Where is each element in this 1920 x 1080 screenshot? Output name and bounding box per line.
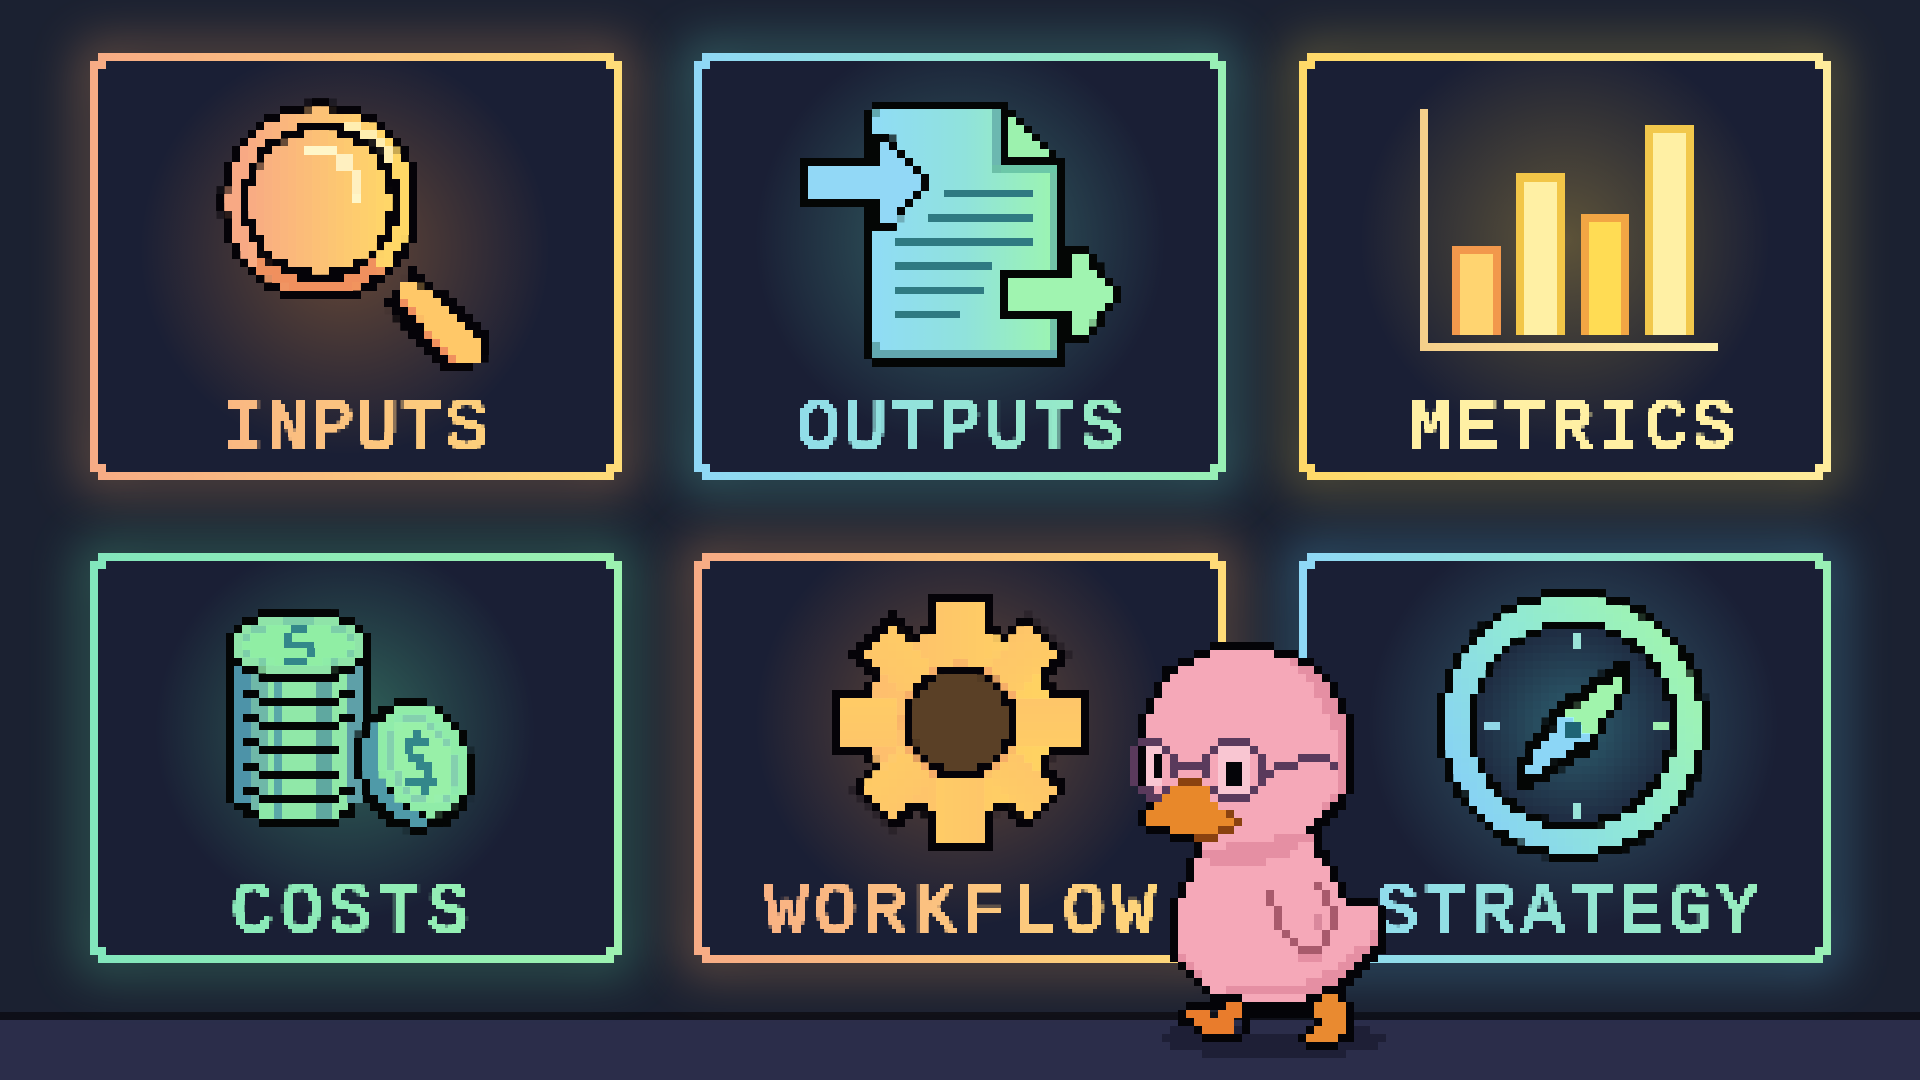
leaning coin: [335, 681, 494, 848]
duck wing crease: [1314, 914, 1322, 930]
duck shading: [1178, 658, 1378, 994]
floor: [0, 1012, 1920, 1080]
duck right foot: [1306, 994, 1346, 1042]
duck glasses frame: [1130, 738, 1338, 802]
bar 3: [1581, 214, 1629, 335]
document text lines: [895, 190, 1033, 318]
arrow in: [800, 134, 932, 232]
chart axes: [1420, 109, 1718, 351]
top coin: [226, 608, 370, 682]
label: costs: COSTS: [231, 874, 469, 954]
panel: costs: [94, 557, 618, 959]
icon: coins: [226, 608, 494, 848]
bar 4: [1645, 125, 1694, 335]
bar 1: [1452, 246, 1501, 335]
duck beak shadow: [1178, 778, 1242, 842]
panel: metrics: [1303, 57, 1827, 476]
label: strategy: STRATEGY: [1376, 874, 1759, 954]
duck eyes: [1154, 754, 1242, 786]
duck mascot: [1130, 642, 1386, 1058]
label: outputs: OUTPUTS: [797, 390, 1123, 470]
compass needle: [1514, 664, 1633, 788]
duck left foot outline: [1178, 1010, 1250, 1042]
duck beak: [1146, 786, 1234, 834]
panel: inputs: [94, 57, 618, 476]
dollar sign on leaning coin: [405, 730, 437, 795]
bar 2: [1516, 173, 1565, 335]
label: workflow: WORKFLOW: [765, 874, 1155, 954]
icon: bar chart: [1420, 109, 1718, 351]
panel: outputs: [698, 57, 1222, 476]
needle hub: [1565, 722, 1581, 738]
icon: document with arrows: [800, 102, 1123, 367]
arrow out: [1000, 246, 1123, 344]
document fold: [1008, 117, 1049, 157]
duck body: [1146, 650, 1378, 1002]
duck right foot outline: [1298, 1002, 1354, 1050]
dollar sign on top coin: [284, 625, 315, 665]
duck outline: [1138, 642, 1386, 1018]
duck floor shadow: [1162, 1026, 1386, 1058]
coin stack: [226, 633, 371, 827]
panel: strategy: [1303, 557, 1827, 959]
document sheet: [864, 102, 1065, 367]
compass ticks: [1484, 633, 1669, 819]
duck wing: [1266, 882, 1338, 954]
compass ring: [1438, 590, 1708, 860]
icon: magnifying glass: [220, 102, 485, 367]
label: metrics: METRICS: [1409, 390, 1735, 470]
duck glasses lenses: [1146, 746, 1250, 794]
icon: gear: [840, 602, 1080, 842]
label: inputs: INPUTS: [222, 390, 488, 470]
icon: compass: [1438, 590, 1708, 860]
panel: workflow: [698, 557, 1222, 959]
duck left foot: [1186, 1002, 1242, 1034]
